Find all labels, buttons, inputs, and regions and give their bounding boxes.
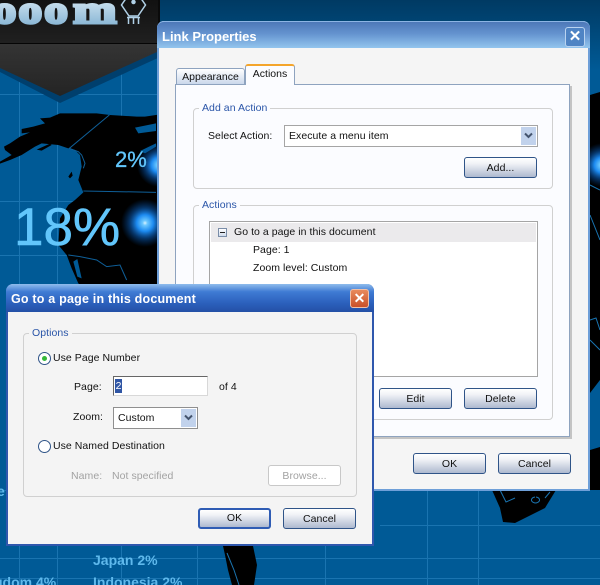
tab: Appearance: Appearance [182,71,239,83]
stat: 2%: 2% [115,147,147,172]
title bar [157,21,590,48]
group: Options [23,333,357,497]
button: Add: Add... [487,162,514,174]
dialog title: Link Properties [162,29,257,44]
close button: ✕ [569,28,581,45]
logo wordmark [0,0,117,32]
glow: 18% marker [121,199,169,247]
button: Delete [464,388,537,409]
button: Browse [268,465,341,486]
label: Select Action: Select Action: [208,130,272,142]
select value: Execute a menu item [289,130,389,142]
dropdown arrow [520,126,537,146]
group: Add an Action [193,108,553,189]
group: Actions [193,205,553,420]
button: OK [413,453,486,474]
title bar [6,284,374,312]
dropdown arrow [180,408,197,428]
button: Add [464,157,537,178]
stat: 18%: 18% [14,198,120,257]
button: OK: OK [442,458,457,470]
radio: named destination [38,440,51,453]
label: Not specified: Not specified [112,470,173,482]
selected row [211,223,536,242]
button: Cancel: Cancel [518,458,551,470]
legend: Actions [202,199,237,211]
map: South America [223,546,257,585]
selected value: 2 [116,380,121,392]
button: Browse: Browse... [282,470,327,482]
country label: Japan: Japan 2% [93,552,158,568]
close button [565,27,585,47]
dialog title: Go to a page in this document [11,292,196,306]
input: page [113,376,208,396]
map: right landmass [590,92,600,490]
select: action [284,125,538,147]
tab: Actions [245,64,295,85]
label: Use Named Destination: Use Named Destination [53,440,165,452]
button: Cancel [283,508,356,529]
button: Delete: Delete [485,393,516,405]
close button: ✕ [354,290,365,306]
map: southern Africa [492,490,556,523]
button: OK: OK [227,512,242,524]
legend: Add an Action [202,102,267,114]
button: Edit [379,388,452,409]
button: Cancel: Cancel [303,513,336,525]
icon: pen-nib lightbulb [122,0,146,24]
minus [220,232,225,233]
close button [350,289,369,308]
select: zoom [113,407,198,429]
banner [0,0,160,103]
detail: zoom level: Zoom level: Custom [253,262,347,274]
tab: Appearance [176,68,245,85]
label: Use Page Number: Use Page Number [53,352,140,364]
label: Page: Page: [74,381,102,393]
button: Cancel [498,453,571,474]
radio dot [42,356,47,361]
button: Edit: Edit [406,393,425,405]
tab: Actions: Actions [253,68,287,80]
label: Zoom: Zoom: [73,411,103,423]
row text: Go to a page in this document [234,226,376,238]
dialog: Link Properties [157,21,590,491]
button: OK [198,508,271,529]
glow: 2% marker [137,143,181,187]
glow: right marker [580,143,600,187]
detail: page: Page: 1 [253,244,290,256]
label: of 4: of 4 [219,381,237,393]
collapse icon [218,228,227,237]
actions list [209,221,538,377]
map: North America [0,113,160,285]
label: Name: Name: [71,470,102,482]
legend: Options [32,327,69,339]
radio: page number [38,352,51,365]
dialog: Go to a page in this document [6,284,374,546]
select value: Custom [118,412,154,424]
tab panel [175,84,570,437]
